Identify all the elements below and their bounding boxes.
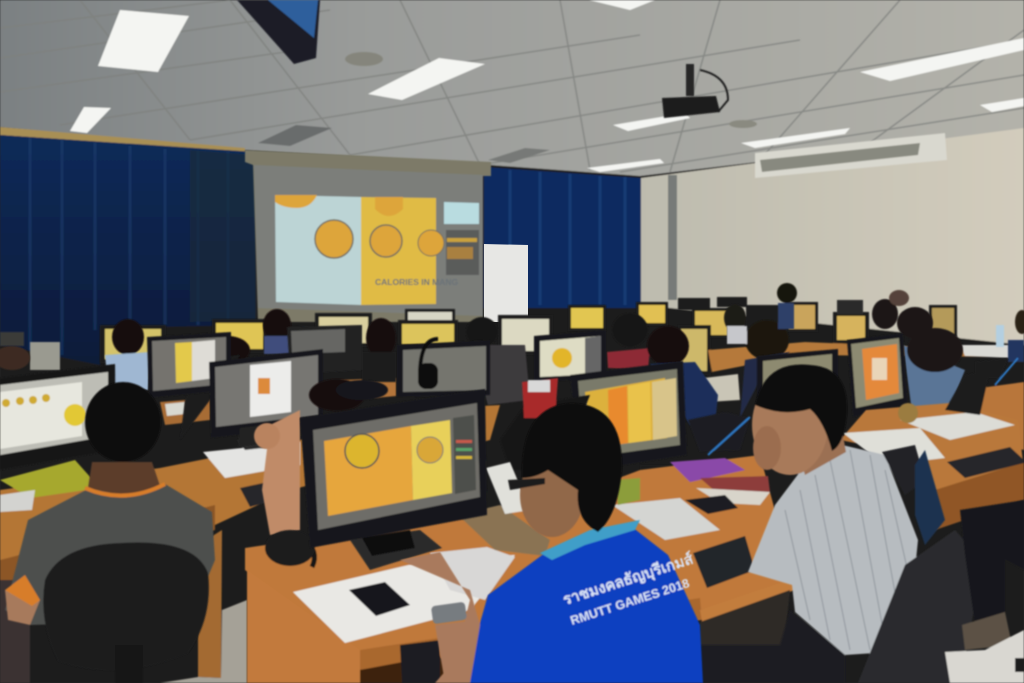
projected artboard (275, 195, 361, 305)
person front: blue shirt (400, 403, 703, 683)
person left: grey t-shirt (5, 382, 215, 683)
desk leg (198, 530, 222, 678)
red bag (522, 378, 558, 418)
yellow folder (0, 460, 100, 498)
headphones and cables (268, 534, 314, 567)
far right person trousers (960, 500, 1024, 625)
projector and air conditioner (237, 0, 947, 178)
back desk strip (708, 342, 1010, 372)
middle monitors (0, 325, 908, 497)
smartphone (349, 582, 410, 616)
shirt print: Thai: ราชมงคลธัญบุรีเกมส์ (561, 549, 697, 610)
left curtain (0, 135, 255, 365)
papers (900, 412, 1015, 440)
floor (160, 600, 247, 683)
ceiling (0, 0, 1024, 176)
water bottle (996, 325, 1004, 347)
ceiling lights (70, 0, 1024, 172)
chair (43, 542, 209, 670)
middle left desk (0, 405, 500, 683)
main front monitor (300, 389, 487, 570)
front desk (245, 455, 795, 683)
projected heading: CALORIES IN MANG (375, 277, 458, 287)
whiteboard (484, 244, 528, 322)
chair at right monitor (945, 370, 990, 415)
papers (203, 442, 300, 478)
gold curtain rail (0, 127, 245, 152)
wall (641, 128, 1024, 345)
middle desk strips (340, 378, 396, 398)
bag on desk (458, 505, 550, 556)
right desk and cabinet (688, 358, 1024, 530)
paper on desk (293, 555, 515, 643)
people in back rows (0, 283, 1024, 440)
chair (858, 530, 983, 683)
seated person at centre row with chair (254, 378, 590, 535)
person right: striped shirt (690, 364, 1024, 683)
ceiling TV (237, 0, 320, 64)
back row of monitors (0, 297, 1012, 425)
workbook (612, 498, 720, 540)
ceiling vents and speaker (258, 52, 757, 163)
keyboard (693, 536, 755, 588)
projection screen (245, 150, 491, 322)
keyboard (240, 476, 300, 507)
right curtain (484, 167, 641, 308)
keyboard (947, 447, 1024, 478)
shirt print: Latin: RMUTT GAMES 2018 (569, 576, 691, 628)
